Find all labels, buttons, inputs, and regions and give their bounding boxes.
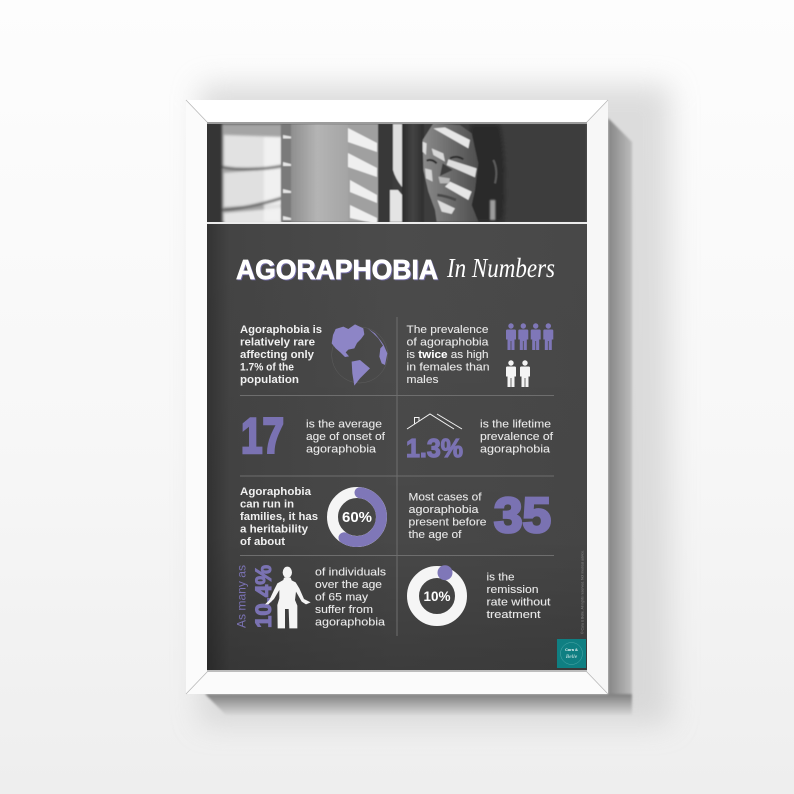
rotated label [234, 565, 276, 628]
donut chart 60% [332, 492, 382, 542]
text: before the age of: Most cases of [408, 492, 482, 504]
photo separator [207, 222, 587, 224]
text: heritability: can run in [240, 498, 294, 510]
text: before the age of [408, 492, 486, 541]
title [236, 253, 555, 286]
stat: twice as high in females [406, 323, 553, 387]
icon: four purple people [506, 323, 553, 350]
poster [207, 122, 587, 672]
icon: two white people [506, 360, 530, 387]
text: rare prevalence: Agoraphobia is [240, 324, 322, 336]
icon: globe [332, 324, 388, 386]
text: rare prevalence: population [240, 374, 299, 386]
icon: house roof [407, 414, 462, 429]
stat: 1.7% of the population [240, 324, 388, 386]
woman's hair [470, 124, 505, 222]
donut chart 60%: 60% [342, 510, 372, 526]
number 1.3%: 1.3% [406, 433, 463, 463]
text: remission rate: treatment [486, 609, 541, 621]
text: remission rate: remission [486, 584, 538, 596]
text: female prevalence: of agoraphobia [406, 336, 489, 348]
text: female prevalence: is twice as high [406, 349, 488, 361]
stat: 35 age of presentation [408, 489, 551, 543]
text: remission rate [486, 572, 551, 621]
text: lifetime prevalence [480, 418, 554, 456]
text: female prevalence: in females than [406, 362, 490, 374]
text: heritability: a heritability [240, 524, 309, 536]
text: heritability [240, 486, 318, 548]
number 35: 35 [494, 489, 551, 543]
donut chart 10%: 10% [424, 589, 450, 604]
text: remission rate: is the [486, 572, 514, 584]
title: In Numbers [446, 253, 555, 283]
text: rare prevalence: affecting only [240, 349, 315, 361]
text: individuals over 65: of 65 may [315, 592, 368, 604]
rotated label: 10.4% [251, 565, 276, 628]
title: AGORAPHOBIA [237, 255, 439, 286]
logo [557, 639, 586, 668]
text: rare prevalence: relatively rare [240, 336, 315, 348]
text: average age [306, 418, 386, 456]
frame shadow [200, 85, 670, 725]
text: individuals over 65: over the age [315, 579, 382, 591]
text: heritability: Agoraphobia [240, 486, 312, 498]
text: average age: agoraphobia [306, 444, 377, 456]
stat: 17 average age of onset [241, 408, 386, 464]
number 17: 17 [241, 408, 284, 464]
text: lifetime prevalence: prevalence of [480, 431, 554, 443]
picture frame [186, 100, 608, 694]
woman's face [423, 123, 496, 222]
text: individuals over 65: suffer from [315, 604, 373, 616]
text: rare prevalence: 1.7% of the [240, 362, 294, 374]
text: before the age of: the age of [408, 529, 462, 541]
text: average age: is the average [306, 418, 382, 430]
title: AGORAPHOBIA [236, 254, 438, 285]
logo: Belle [566, 654, 578, 660]
text: rare prevalence [240, 324, 322, 386]
text: individuals over 65: agoraphobia [315, 616, 386, 628]
stat: 60% heritability [240, 486, 382, 548]
poster background [207, 122, 587, 672]
text: lifetime prevalence: agoraphobia [480, 444, 551, 456]
banner photo: woman at window blinds [208, 123, 586, 224]
stat: 10.4% over 65 [234, 565, 386, 628]
text: individuals over 65 [315, 566, 386, 628]
text: before the age of: agoraphobia [408, 504, 479, 516]
text: female prevalence [406, 324, 490, 386]
text: lifetime prevalence: is the lifetime [480, 418, 551, 430]
text: remission rate: rate without [486, 596, 551, 608]
text: heritability: of about [240, 536, 285, 548]
stat: 10% remission [413, 565, 551, 621]
text: heritability: families, it has [240, 511, 318, 523]
stat: 1.3% lifetime prevalence [406, 414, 554, 463]
copyright note: © Cara & Belle. All rights reserved. Not medical advice. [580, 550, 584, 634]
icon: seated person [265, 567, 311, 628]
rotated label: As many as [234, 565, 248, 628]
text: average age: age of onset of [306, 431, 386, 443]
logo: Cara & [565, 647, 578, 652]
text: female prevalence: males [406, 374, 439, 386]
text: female prevalence: The prevalence [406, 324, 488, 336]
text: before the age of: present before [408, 516, 486, 528]
text: individuals over 65: of individuals [315, 566, 386, 578]
